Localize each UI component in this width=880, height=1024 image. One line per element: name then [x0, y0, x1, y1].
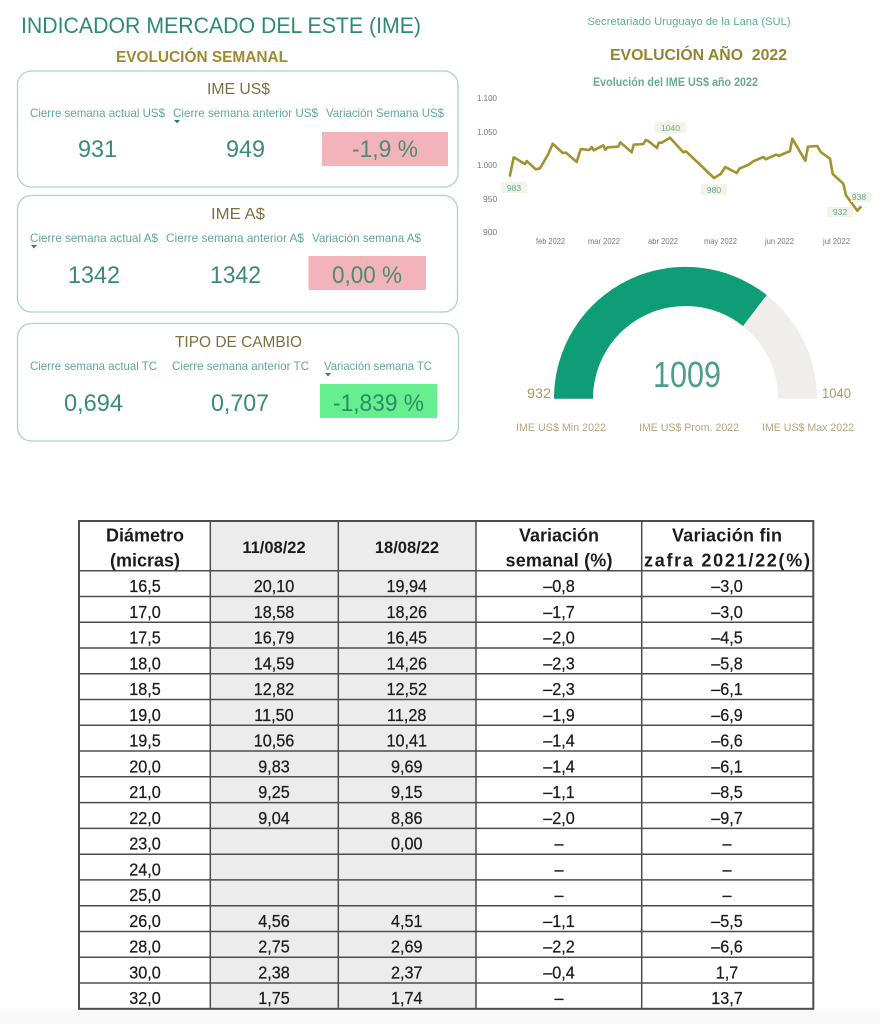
data labels	[501, 122, 871, 217]
row 17,0: 18,26	[386, 602, 427, 622]
heading: evolución año 2022: EVOLUCIÓN AÑO 2022	[610, 44, 787, 64]
column labels: Cierre semana anterior A$	[166, 231, 304, 245]
row 17,0: 17,0	[129, 602, 161, 622]
row 18,5: 18,5	[129, 679, 161, 699]
row 20,0: –6,1	[711, 757, 743, 777]
chart title: Evolución del IME US$ año 2022	[593, 77, 758, 89]
variation badge: -1,839 %	[333, 390, 424, 417]
row 18,5: –2,3	[543, 679, 575, 699]
row 22,0: 8,86	[391, 808, 422, 828]
table header: Diámetro	[106, 526, 184, 546]
row 16,5: 20,10	[254, 576, 294, 596]
value: current week: 931	[78, 136, 117, 163]
panel: IME US$	[18, 71, 458, 187]
row 30,0: 1,7	[716, 963, 738, 983]
row 22,0	[129, 808, 743, 828]
row 30,0	[129, 963, 738, 983]
row 23,0: –	[554, 834, 564, 854]
variation badge	[308, 256, 426, 290]
x axis labels	[536, 236, 850, 246]
row 21,0	[129, 782, 743, 802]
row 18,5	[129, 679, 743, 699]
table header: semanal (%)	[506, 550, 612, 570]
row 20,0: 9,69	[391, 757, 422, 777]
row 28,0: –2,2	[543, 937, 575, 957]
row 20,0: 9,83	[258, 757, 290, 777]
row 19,0: –1,9	[543, 705, 575, 725]
row 21,0: –8,5	[711, 782, 743, 802]
column labels	[30, 359, 432, 373]
x axis labels: mar 2022	[588, 236, 620, 246]
row 28,0: 28,0	[129, 937, 161, 957]
row 17,0: –3,0	[711, 602, 743, 622]
row 19,5	[129, 731, 743, 751]
column labels	[30, 106, 444, 120]
table header	[106, 526, 810, 570]
row 17,5	[129, 628, 743, 648]
row 32,0: 1,74	[391, 988, 423, 1008]
value: previous week: 0,707	[211, 390, 269, 417]
variation badge	[322, 132, 448, 166]
column labels: Cierre semana anterior TC	[172, 359, 309, 373]
variation badge: 0,00 %	[332, 262, 402, 289]
row 30,0: 30,0	[129, 963, 161, 983]
column labels: Variación semana TC	[324, 359, 432, 373]
data labels: 932	[833, 207, 847, 217]
row 24,0: –	[554, 860, 564, 880]
x axis labels: abr 2022	[648, 236, 678, 246]
table header: (micras)	[110, 550, 180, 570]
row 19,5: –1,4	[543, 731, 575, 751]
row 24,0: –	[723, 860, 732, 880]
row 32,0: 32,0	[129, 988, 161, 1008]
row 17,5: 16,45	[386, 628, 427, 648]
table header: Variación	[519, 526, 599, 546]
gauge value: 1009	[653, 354, 721, 395]
row 25,0: 25,0	[129, 885, 161, 905]
row 16,5: 16,5	[129, 576, 161, 596]
row 30,0: 2,38	[258, 963, 290, 983]
column labels: Cierre semana actual US$	[30, 106, 165, 120]
sort marker	[31, 245, 37, 248]
column labels: Cierre semana actual TC	[30, 359, 157, 373]
row 22,0: –2,0	[543, 808, 575, 828]
gauge chart	[516, 267, 854, 434]
x axis labels: may 2022	[704, 236, 737, 246]
data labels: 938	[852, 192, 866, 202]
row 19,0	[129, 705, 743, 725]
row 16,5: –3,0	[711, 576, 743, 596]
row 21,0: 9,15	[391, 782, 422, 802]
value: previous week: 949	[226, 136, 265, 163]
row 18,0: –2,3	[543, 654, 575, 674]
row 22,0: –9,7	[711, 808, 743, 828]
row 20,0: 20,0	[129, 757, 161, 777]
row 17,5: –4,5	[711, 628, 743, 648]
column labels	[30, 231, 421, 245]
gauge captions	[516, 422, 854, 434]
value: current week: 0,694	[64, 390, 123, 417]
source label: Secretariado Uruguayo de la Lana (SUL)	[588, 16, 790, 28]
row 32,0: –	[554, 988, 564, 1008]
row 28,0	[129, 937, 743, 957]
x axis labels: jun 2022	[764, 236, 794, 246]
panel: IME A$	[18, 196, 458, 312]
table header: zafra 2021/22(%)	[644, 550, 810, 570]
row 16,5: 19,94	[386, 576, 427, 596]
row 32,0	[129, 988, 743, 1008]
row 23,0: 0,00	[391, 834, 422, 854]
sort marker	[325, 373, 331, 376]
gauge captions: IME US$ Max 2022	[762, 422, 854, 434]
row 18,0: 14,26	[386, 654, 427, 674]
row 24,0	[129, 860, 732, 880]
row 19,0: –6,9	[711, 705, 743, 725]
row 23,0: 23,0	[129, 834, 161, 854]
row 19,5: –6,6	[711, 731, 743, 751]
row 25,0: –	[554, 885, 564, 905]
row 19,0: 11,28	[387, 705, 426, 725]
variation badge	[320, 384, 437, 418]
row 18,5: 12,52	[386, 679, 427, 699]
row 19,0: 11,50	[254, 705, 294, 725]
row 18,5: 12,82	[254, 679, 294, 699]
x axis labels: feb 2022	[536, 236, 565, 246]
row 16,5	[129, 576, 743, 596]
row 30,0: –0,4	[543, 963, 575, 983]
row 32,0: 1,75	[258, 988, 290, 1008]
data labels: 983	[507, 183, 521, 193]
panel: tipo de cambio	[18, 324, 458, 441]
value: previous week: 1342	[210, 262, 261, 289]
row 18,0: 14,59	[254, 654, 294, 674]
y axis labels: 1.050	[477, 127, 497, 137]
row 18,0	[129, 654, 743, 674]
table header: 11/08/22	[242, 539, 306, 557]
data line	[510, 138, 861, 211]
column labels: Cierre semana actual A$	[30, 231, 158, 245]
gauge track	[554, 267, 817, 399]
row 16,5: –0,8	[543, 576, 575, 596]
row 26,0: 4,56	[258, 911, 290, 931]
row 17,0: –1,7	[543, 602, 575, 622]
gauge maximum: 1040	[822, 385, 851, 401]
row 28,0: 2,75	[258, 937, 290, 957]
row 26,0: –5,5	[711, 911, 743, 931]
title: INDICADOR MERCADO DEL ESTE (IME)	[21, 13, 421, 38]
column labels: Variación semana A$	[312, 231, 421, 245]
row 26,0: 26,0	[129, 911, 161, 931]
row 26,0: 4,51	[391, 911, 422, 931]
sort marker	[174, 120, 180, 124]
row 24,0: 24,0	[129, 860, 161, 880]
row 21,0: 21,0	[129, 782, 161, 802]
line chart: IME US$ 2022	[477, 77, 871, 246]
row 17,0: 18,58	[254, 602, 294, 622]
row 22,0: 9,04	[258, 808, 290, 828]
row 22,0: 22,0	[129, 808, 161, 828]
row 17,5: 16,79	[254, 628, 294, 648]
row 17,5: –2,0	[543, 628, 575, 648]
table header: Variación fin	[672, 526, 782, 546]
panel heading: IME US$	[207, 81, 270, 98]
column labels: Variación Semana US$	[326, 106, 444, 120]
data labels: 980	[707, 185, 721, 195]
gauge captions: IME US$ Min 2022	[516, 422, 606, 434]
row 26,0	[129, 911, 743, 931]
heading: evolución semanal: EVOLUCIÓN SEMANAL	[116, 47, 288, 66]
row 21,0: –1,1	[543, 782, 575, 802]
row 19,5: 10,41	[386, 731, 427, 751]
gauge value arc	[554, 267, 767, 399]
y axis labels	[477, 93, 497, 237]
row 19,5: 10,56	[254, 731, 294, 751]
row 30,0: 2,37	[391, 963, 422, 983]
value: current week: 1342	[68, 262, 120, 289]
y axis labels: 1.100	[477, 93, 497, 103]
row 26,0: –1,1	[543, 911, 575, 931]
price table	[79, 521, 813, 1009]
y axis labels: 900	[483, 227, 497, 237]
row 18,0: –5,8	[711, 654, 743, 674]
row 32,0: 13,7	[711, 988, 743, 1008]
row 28,0: 2,69	[391, 937, 422, 957]
row 18,5: –6,1	[711, 679, 743, 699]
row 28,0: –6,6	[711, 937, 743, 957]
column labels: Cierre semana anterior US$	[173, 106, 318, 120]
row 20,0: –1,4	[543, 757, 575, 777]
y axis labels: 950	[483, 194, 497, 204]
row 17,0	[129, 602, 743, 622]
row 25,0: –	[723, 885, 732, 905]
row 19,0: 19,0	[129, 705, 161, 725]
row 20,0	[129, 757, 743, 777]
row 21,0: 9,25	[258, 782, 290, 802]
row 23,0: –	[723, 834, 732, 854]
panel heading: IME A$	[211, 206, 265, 223]
panel heading: TIPO DE CAMBIO	[175, 334, 302, 351]
x axis labels: jul 2022	[822, 236, 850, 246]
row 23,0	[129, 834, 732, 854]
row 19,5: 19,5	[129, 731, 161, 751]
gauge captions: IME US$ Prom. 2022	[639, 422, 739, 434]
data labels: 1040	[661, 123, 680, 133]
row 18,0: 18,0	[129, 654, 161, 674]
y axis labels: 1.000	[477, 160, 497, 170]
gauge minimum: 932	[527, 385, 551, 401]
row 25,0	[129, 885, 732, 905]
variation badge: -1,9 %	[352, 136, 418, 163]
table header: 18/08/22	[375, 539, 439, 557]
row 17,5: 17,5	[129, 628, 161, 648]
